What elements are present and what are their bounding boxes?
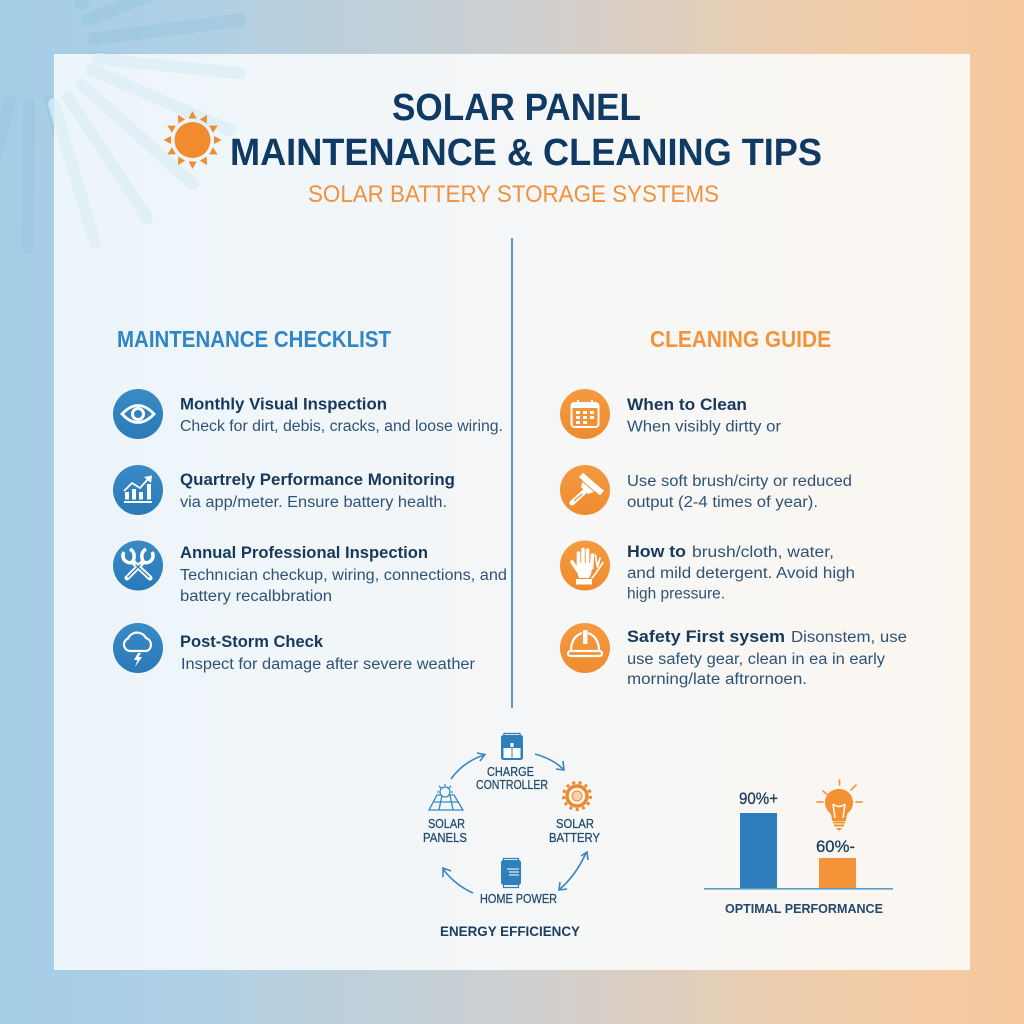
item: how to: high pressure.: [627, 586, 725, 602]
arrow: panels to controller: [451, 753, 485, 779]
icon: solar panels: [429, 784, 463, 810]
label: home power: HOME POWER: [480, 892, 557, 906]
item: quarterly performance monitoring: via app/meter. Ensure battery health.: [180, 494, 447, 511]
arrow: home power to panels: [443, 868, 473, 893]
item: safety first: Disonstem, use: [791, 629, 907, 646]
item: annual professional inspection: Annual Professional Inspection: [180, 543, 428, 562]
decorative sun rays on panel: [54, 59, 240, 243]
item: safety first: morning/late aftrornoen.: [627, 671, 807, 688]
item: safety first: [560, 623, 907, 688]
arrow: controller to battery: [535, 754, 564, 770]
item: monthly visual inspection: Monthly Visual Inspection: [180, 394, 387, 414]
chart baseline: [704, 888, 893, 890]
icon: home power: [501, 858, 521, 888]
value: 60%-: 60%-: [816, 837, 855, 856]
item: how to: How to: [627, 542, 686, 561]
item: annual professional inspection: Technıcian checkup, wiring, connections, and: [180, 567, 507, 584]
item: when to clean: When to Clean: [627, 395, 747, 414]
item: use soft brush: [560, 465, 852, 515]
decorative sun rays on background: [0, 0, 240, 248]
item: quarterly performance monitoring: [113, 465, 455, 515]
label: battery: BATTERY: [549, 831, 601, 845]
heading: cleaning guide: CLEANING GUIDE: [650, 326, 831, 352]
title: MAINTENANCE & CLEANING TIPS: [230, 132, 822, 174]
item: post-storm check: Inspect for damage after severe weather: [181, 656, 475, 673]
arrow: battery to home power: [559, 852, 588, 890]
item: use soft brush: Use soft brush/cirty or reduced: [627, 473, 852, 490]
icon: solar battery: [564, 782, 590, 810]
bar chart: optimal performance: [704, 780, 893, 916]
item: safety first: use safety gear, clean in ea in early: [627, 651, 885, 668]
item: how to: and mild detergent. Avoid high: [627, 565, 855, 582]
item: when to clean: [560, 389, 781, 439]
item: annual professional inspection: [113, 540, 507, 605]
label: optimal performance: OPTIMAL PERFORMANCE: [725, 902, 883, 916]
icon: light bulb: [817, 780, 862, 831]
heading: maintenance checklist: MAINTENANCE CHECKLIST: [117, 326, 391, 352]
title: SOLAR PANEL: [392, 87, 641, 129]
subtitle: SOLAR BATTERY STORAGE SYSTEMS: [308, 181, 719, 208]
item: safety first: Safety First sysem: [627, 627, 785, 646]
bar: 90%+: [740, 813, 777, 889]
label: charge controller: CHARGE: [487, 765, 534, 779]
center divider: [511, 238, 513, 708]
item: how to: [560, 540, 855, 602]
label: energy efficiency: ENERGY EFFICIENCY: [440, 923, 581, 939]
value: 90%+: 90%+: [739, 789, 778, 808]
item: use soft brush: output (2-4 times of year).: [627, 494, 818, 511]
icon: charge controller: [501, 734, 523, 760]
label: panels: PANELS: [423, 831, 467, 845]
label: controller: CONTROLLER: [476, 778, 548, 792]
item: annual professional inspection: battery recalbbration: [180, 588, 332, 605]
item: when to clean: When visibly dirtty or: [627, 418, 781, 436]
item: post-storm check: Post-Storm Check: [180, 632, 324, 651]
item: quarterly performance monitoring: Quartrely Performance Monitoring: [180, 470, 455, 489]
label: solar battery: SOLAR: [556, 817, 594, 831]
item: monthly visual inspection: [113, 389, 503, 439]
panel: cleaning guide: [560, 389, 907, 688]
icon: sun: [164, 111, 222, 169]
cycle diagram: energy flow: [423, 734, 601, 939]
label: solar panels: SOLAR: [428, 817, 465, 831]
title: [230, 87, 822, 174]
bar: 60%-: [819, 858, 856, 889]
item: how to: brush/cloth, water,: [692, 544, 834, 561]
panel: maintenance checklist: [113, 389, 507, 673]
item: monthly visual inspection: Check for dirt, debis, cracks, and loose wiring.: [180, 418, 503, 435]
item: post-storm check: [113, 623, 475, 673]
